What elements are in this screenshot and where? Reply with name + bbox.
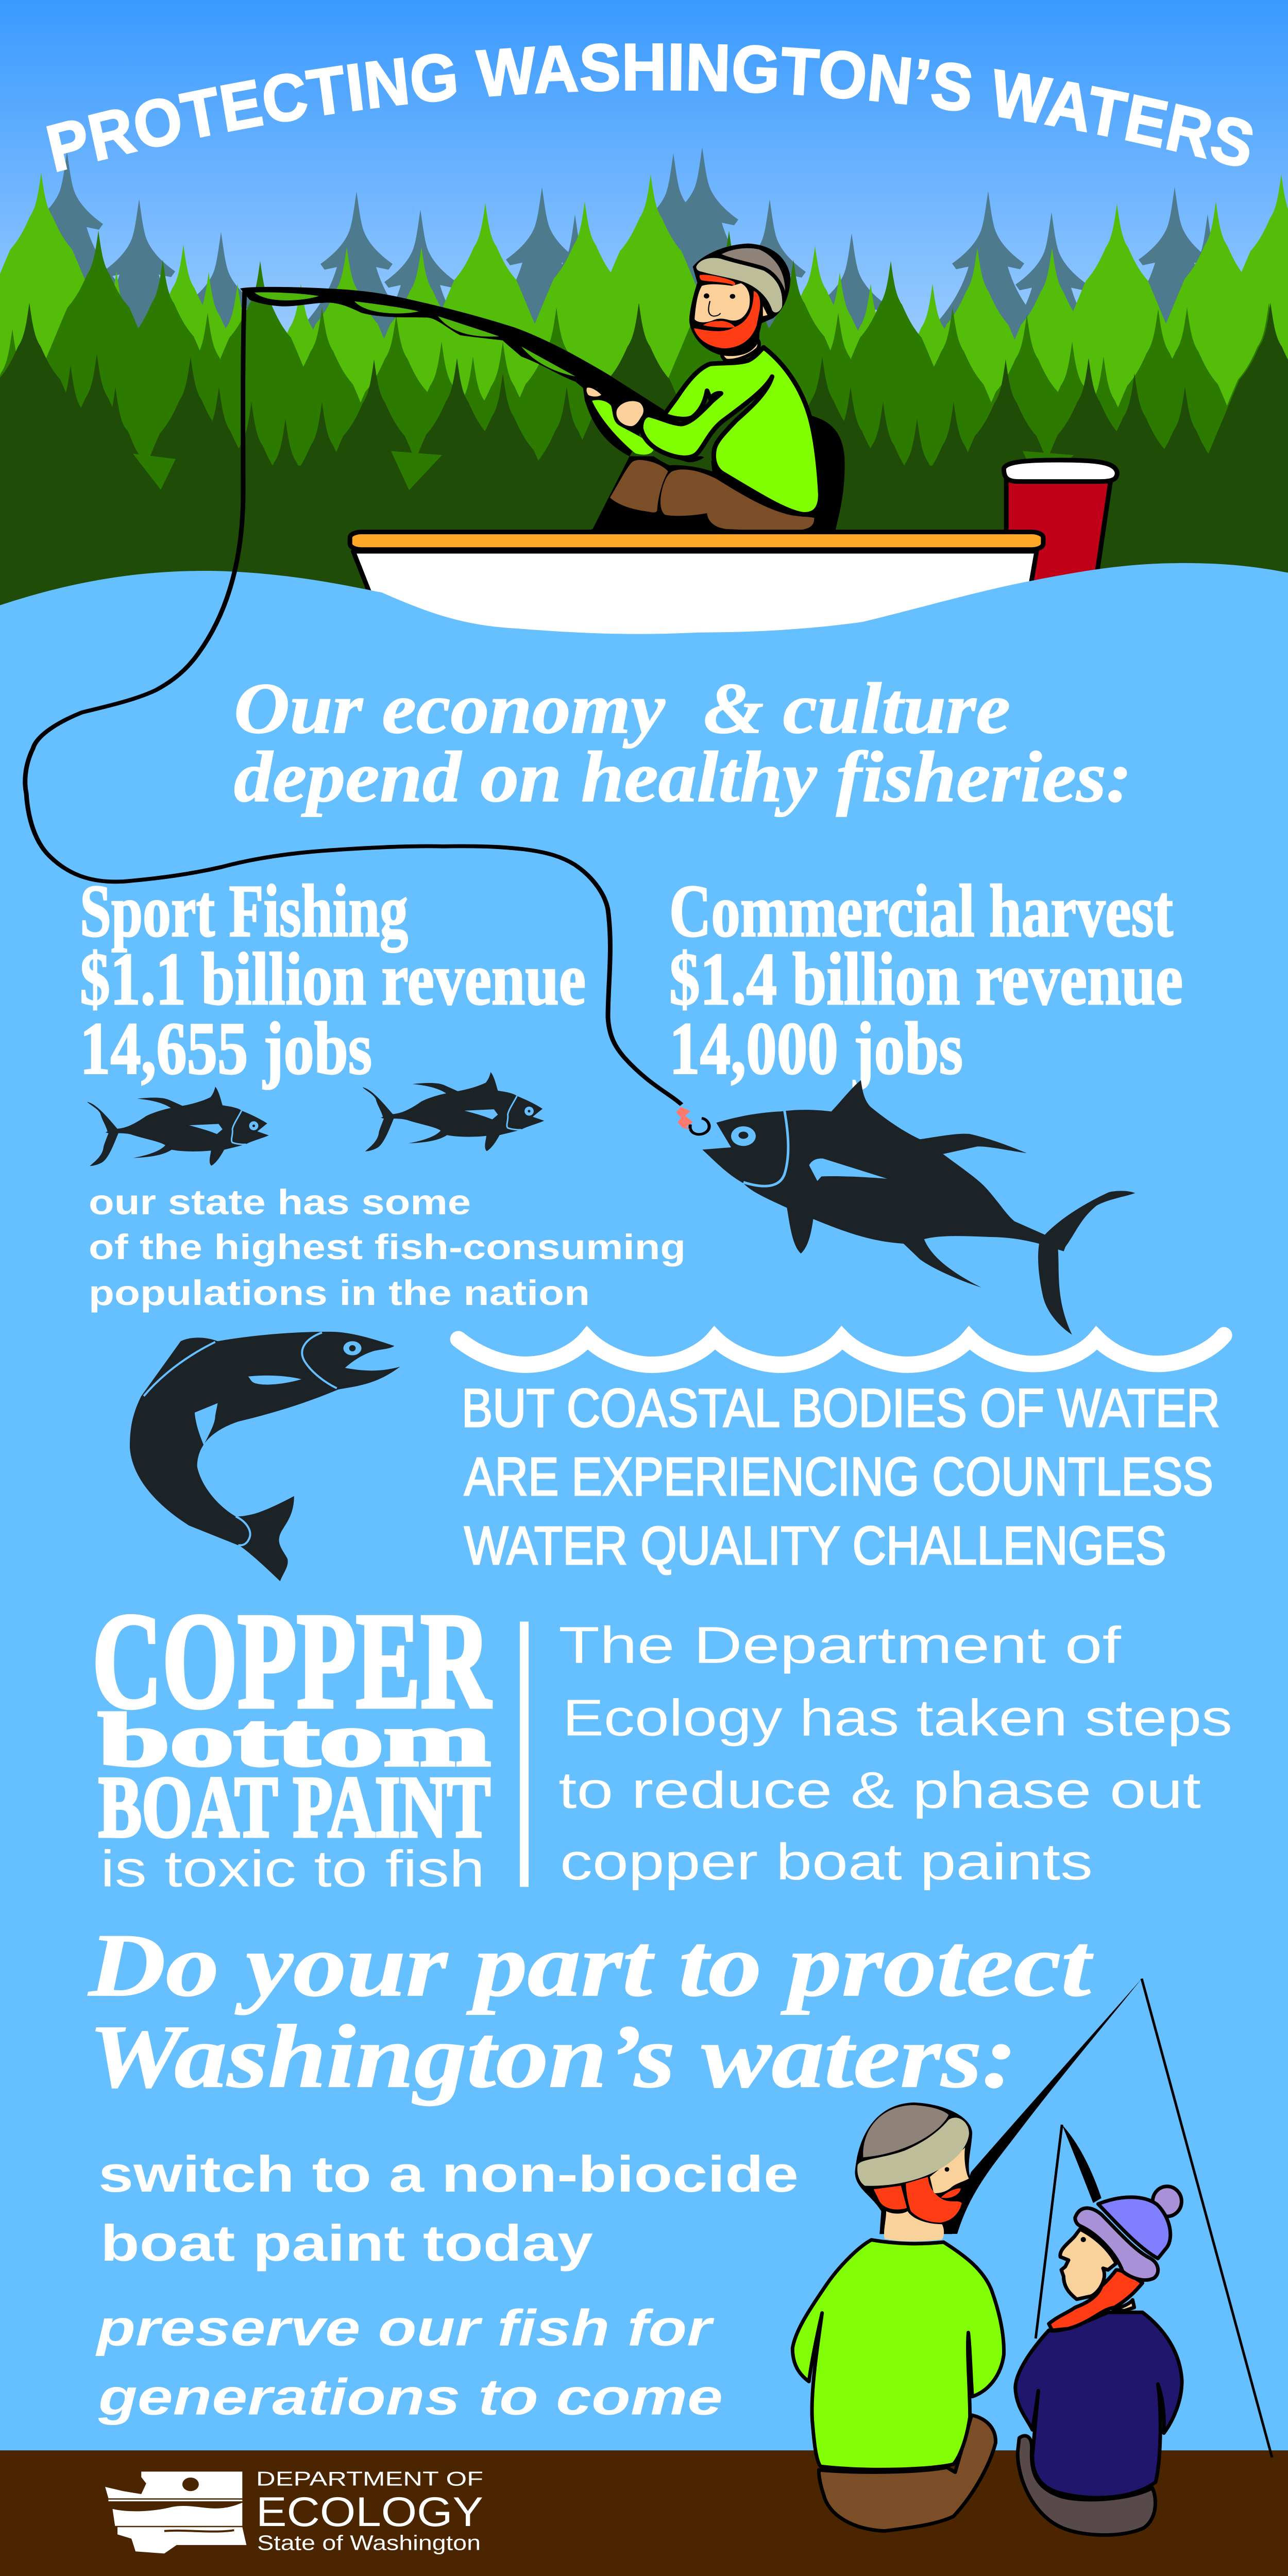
fisherman: [582, 244, 845, 531]
bright green trees: [0, 173, 1288, 635]
hook: [690, 1118, 709, 1134]
boat motor: [1004, 460, 1117, 588]
dark front trees: [0, 302, 1288, 770]
mouth: [703, 321, 735, 328]
heading: do your part: Washington’s waters:: [89, 2007, 1017, 2107]
logo: department of ecology: State of Washington: [257, 2532, 481, 2555]
ground: [0, 2450, 1288, 2576]
stat block: commercial harvest: 14,000 jobs: [669, 1007, 963, 1090]
eyes and nose: [704, 293, 735, 316]
man's fishing rod and line: [950, 1979, 1272, 2458]
head: [689, 244, 790, 356]
title: PROTECTING WASHINGTON’S WATERS: [46, 43, 1253, 172]
text: fish consumption note: [89, 1183, 686, 1313]
beard: [874, 2177, 962, 2223]
text: copper bottom boat paint: bottom: [98, 1698, 490, 1782]
text: department of ecology steps: to reduce & phase out: [558, 1761, 1201, 1819]
text: department of ecology steps: Ecology has taken steps: [563, 1689, 1232, 1747]
small tuna left: [87, 1087, 269, 1166]
heading: economy and culture: Our economy & culture: [234, 668, 1010, 749]
logo: department of ecology: ECOLOGY: [256, 2488, 483, 2535]
neck: [722, 339, 759, 361]
heading: do your part: Do your part to protect: [88, 1916, 1094, 2015]
face: [694, 283, 750, 323]
beard: [694, 291, 760, 348]
pompom: [1153, 2187, 1181, 2216]
text: fish consumption note: our state has some: [89, 1183, 471, 1222]
hair: [700, 275, 735, 285]
fin cuts: [195, 1376, 301, 1445]
pectoral fin highlight: [809, 1159, 887, 1181]
near leg: [660, 469, 814, 531]
text: call to action: boat paint today: [100, 2214, 593, 2272]
decorative wave line: [459, 1335, 1224, 1365]
torso and near arm: [641, 347, 820, 514]
far arm: [592, 400, 654, 455]
sky background: [0, 0, 1288, 439]
text: copper bottom boat paint: BOAT PAINT: [98, 1758, 490, 1856]
sweater: [792, 2240, 1004, 2469]
red braid: [1049, 2270, 1143, 2330]
hat band: [1075, 2208, 1158, 2280]
beanie band: [696, 258, 782, 313]
logo: department of ecology: [105, 2468, 483, 2555]
bait: [676, 1107, 693, 1130]
couple fishing from the shore: [792, 2103, 1182, 2535]
mid green trees: [0, 231, 1288, 708]
neck: [884, 2211, 944, 2242]
text: fish consumption note: of the highest fish-consuming: [89, 1228, 686, 1267]
black grip area: [582, 376, 664, 456]
water: [0, 563, 1288, 2460]
text: coastal water challenges: [462, 1378, 1220, 1576]
text: department of ecology steps: [558, 1617, 1232, 1891]
hands: [586, 387, 643, 426]
head outline: [689, 244, 790, 356]
text: copper bottom boat paint: COPPER: [92, 1585, 492, 1737]
icon: large tuna on hook: [702, 1080, 1135, 1335]
heading: economy and culture: [234, 668, 1132, 817]
man: [792, 2103, 1004, 2531]
distant blue trees: [0, 147, 1285, 479]
text: fish consumption note: populations in the nation: [89, 1273, 590, 1313]
stat block: sport fishing: $1.1 billion revenue: [80, 938, 586, 1021]
small tuna right: [363, 1072, 544, 1151]
beanie top: [721, 248, 785, 291]
icons: small tuna pair: [87, 1072, 544, 1166]
forest background: [0, 147, 1288, 770]
boots and lower outline: [587, 456, 817, 531]
hat top: [1098, 2197, 1171, 2259]
fishing line with hook: [25, 290, 709, 1134]
fishing rod: [240, 287, 654, 417]
boat rim: [350, 532, 1043, 550]
far leg: [610, 460, 668, 513]
hat top: [863, 2105, 948, 2157]
pants: [1018, 2436, 1156, 2535]
text: department of ecology steps: The Department of: [558, 1617, 1122, 1674]
heading: economy and culture: depend on healthy fisheries:: [234, 737, 1132, 817]
gap between lap and arm: [654, 451, 713, 471]
icon: leaping salmon: [130, 1332, 400, 1581]
text: call to action: preserve our fish for: [95, 2299, 715, 2357]
eye: [731, 1126, 756, 1146]
head underlay: [855, 2103, 972, 2234]
sweater: [1015, 2312, 1182, 2498]
face: [1060, 2229, 1116, 2299]
neck: [1113, 2300, 1134, 2311]
trousers: [819, 2415, 995, 2531]
stat block: commercial harvest: [669, 870, 1183, 1090]
face: [930, 2147, 969, 2193]
eye: [343, 1341, 362, 1355]
woman's rod and line: [1036, 2125, 1101, 2338]
seat back: [794, 410, 845, 531]
lower branch patches: [133, 451, 1074, 490]
hat band: [857, 2117, 969, 2186]
text: call to action: switch to a non-biocide: [98, 2145, 799, 2202]
stat block: sport fishing: [80, 870, 586, 1090]
eye: [1081, 2237, 1086, 2242]
logo: department of ecology: DEPARTMENT OF: [256, 2468, 483, 2490]
text: call to action: [95, 2145, 799, 2425]
eye: [945, 2167, 949, 2172]
text: call to action: generations to come: [98, 2368, 723, 2425]
state of washington emblem: [105, 2471, 246, 2553]
text: copper bottom boat paint: [92, 1585, 492, 1898]
text: department of ecology steps: copper boat paints: [560, 1833, 1093, 1891]
stat block: sport fishing: 14,655 jobs: [80, 1007, 372, 1090]
boat hull: [353, 551, 1037, 655]
boat: [350, 532, 1043, 655]
stat block: sport fishing: Sport Fishing: [80, 870, 408, 953]
ear: [763, 306, 768, 316]
text: copper bottom boat paint: is toxic to fish: [100, 1840, 485, 1898]
heading: do your part: [88, 1916, 1094, 2107]
divider: [520, 1621, 529, 1887]
woman: [1015, 2187, 1182, 2535]
